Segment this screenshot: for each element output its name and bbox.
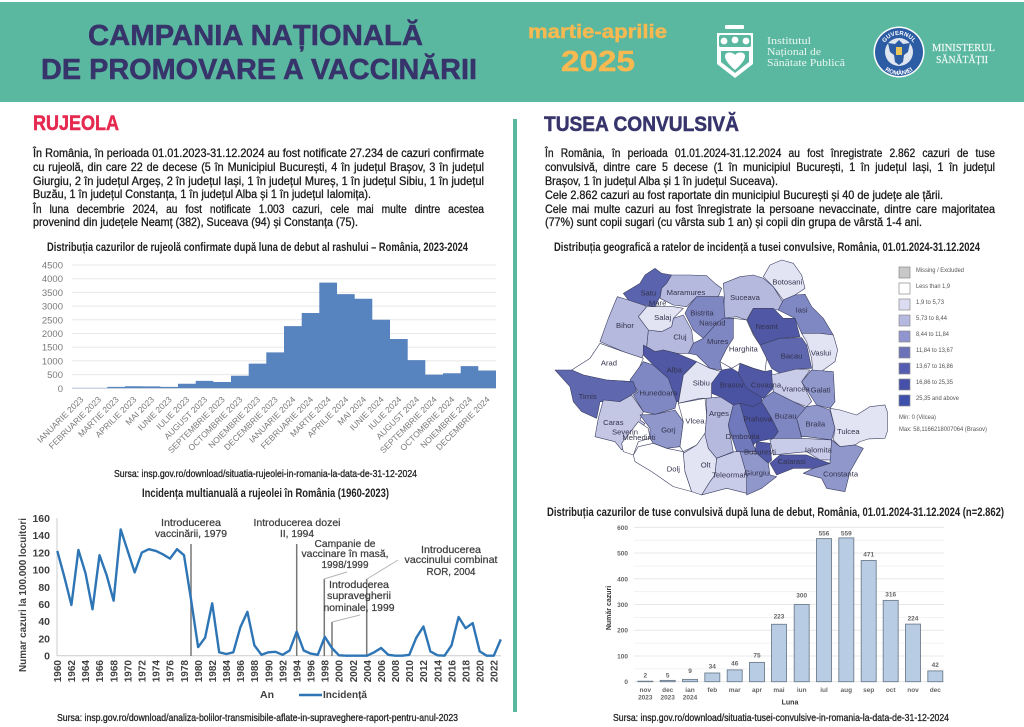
bar chart: measles cases by month: 500: [47, 370, 63, 381]
bar chart: pertussis cases by month: nov: [907, 687, 919, 694]
map: incidence by county: Vlcea: [685, 416, 705, 425]
line chart: multiannual incidence: 60: [38, 599, 50, 611]
bar chart: pertussis cases by month: aug: [841, 687, 852, 694]
bar chart: pertussis cases by month: 223: [774, 614, 785, 621]
header band: [0, 2, 1024, 102]
annotations: supravegherii: [327, 590, 391, 602]
line chart: multiannual incidence: 1982: [208, 660, 219, 682]
title: [41, 19, 477, 86]
map: incidence by county: Hunedoara: [639, 389, 678, 398]
text block: Rujeola summary: [32, 145, 484, 229]
bar chart: measles cases by month: 2000: [42, 329, 63, 340]
text block: Rujeola summary: Giurgiu, 2 în județul Argeș, 2 în județul Iași, 1 în județul Mureș, 1 în județul Sibiu, 1 în județul: [33, 174, 484, 188]
line chart: multiannual incidence: 140: [32, 530, 50, 542]
bar chart: pertussis cases by month: dec: [662, 687, 674, 694]
annotations: ROR, 2004: [426, 566, 476, 578]
bar chart: measles cases by month: IUNIE 2023: [136, 394, 174, 432]
text block: Rujeola summary: cu rujeolă, din care 22 de decese (5 în Municipiul București, 4 în județul Brașov, 3 în județul: [33, 160, 484, 174]
line chart: multiannual incidence: 2020: [476, 660, 486, 682]
bar chart: measles cases by month: MAI 2023: [123, 394, 156, 427]
line chart: multiannual incidence: 1984: [222, 660, 233, 682]
bar chart: measles cases by month: [35, 260, 496, 455]
bar chart: measles cases by month: IANUARIE 2024: [247, 394, 298, 445]
line chart: multiannual incidence: 1990: [264, 660, 275, 682]
annotations: Introducerea dozei: [254, 517, 340, 529]
line chart: multiannual incidence: 2010: [405, 660, 416, 682]
bar chart: pertussis cases by month: 600: [617, 525, 628, 532]
bar chart: pertussis cases by month: apr: [752, 687, 763, 694]
text block: pertussis summary: (77%) sunt copii sugari (cu vârsta sub 1 an) și copii din grupa de vârstă 1-4 ani.: [545, 215, 922, 229]
bar chart: pertussis cases by month: 0: [624, 679, 628, 686]
bar chart: pertussis cases by month: 2023: [638, 694, 653, 702]
line chart: multiannual incidence: 1968: [109, 660, 120, 682]
map legend: 8,44 to 11,84: [916, 332, 950, 338]
line chart: multiannual incidence: 100: [32, 565, 50, 577]
bar chart: pertussis cases by month: 556: [819, 530, 830, 537]
line chart: multiannual incidence: 2006: [377, 660, 388, 682]
map: incidence by county: Giurgiu: [744, 469, 769, 478]
line chart: multiannual incidence: [17, 513, 501, 701]
source: measles multiannual: Sursa: insp.gov.ro/download/analiza-bolilor-transmisibile-aflate-in-supraveghere-raport-pentru-anul-2023: [57, 712, 458, 724]
map: incidence by county: Tulcea: [837, 427, 860, 436]
map: incidence by county: Gorj: [661, 425, 676, 434]
line chart: multiannual incidence: 2004: [363, 660, 374, 682]
bar chart: measles cases by month: 4500: [42, 260, 63, 272]
map: incidence by county: Salaj: [654, 313, 671, 322]
bar chart: pertussis cases by month: 200: [617, 628, 628, 635]
map: incidence by county: Alba: [667, 365, 683, 374]
bar chart: measles cases by month: IULIE 2023: [154, 394, 192, 431]
panel: Tusea convulsiva: [544, 113, 1004, 724]
map: incidence by county: Vaslui: [811, 349, 831, 358]
line chart: multiannual incidence: 1962: [67, 660, 78, 682]
bar chart: pertussis cases by month: 5: [666, 672, 670, 679]
map: incidence by county: Neamt: [755, 322, 779, 331]
line chart: multiannual incidence: 1996: [307, 660, 318, 682]
line chart: multiannual incidence: 2012: [419, 660, 430, 682]
line chart: multiannual incidence: 1966: [95, 660, 106, 682]
map: incidence by county: Severin: [612, 428, 638, 437]
map legend: Missing / Excluded: [916, 268, 964, 274]
annotations: vaccinare în masă,: [302, 548, 388, 560]
panel: Rujeola: [17, 112, 501, 724]
chart title: measles multiannual: Incidența multianuală a rujeolei în România (1960-2023): [142, 488, 389, 500]
campaign date: [528, 22, 667, 78]
bar chart: measles cases by month: APRILIE 2024: [305, 394, 351, 440]
bar chart: pertussis cases by month: 100: [617, 654, 628, 660]
line chart: multiannual incidence: 1960: [53, 660, 64, 682]
text block: Rujeola summary: provenind din județele Neamț (382), Suceava (94) și Constanța (75).: [33, 215, 358, 229]
text block: pertussis summary: [544, 145, 995, 229]
map: incidence by county: Ialomita: [805, 445, 832, 454]
campaign date: 2025: [561, 46, 635, 78]
line chart: multiannual incidence: 1994: [292, 660, 304, 682]
bar chart: pertussis cases by month: 75: [753, 652, 761, 659]
logo: Institutul National de Sanatate Publica: Institutul: [767, 35, 811, 47]
map: incidence by county: Brasov: [720, 380, 744, 389]
map: incidence by county: [555, 260, 887, 495]
map: incidence by county: Nasaud: [699, 319, 726, 328]
line chart: multiannual incidence: 0: [44, 651, 50, 663]
legend: Incidență: [323, 689, 367, 701]
map: incidence by county: Mare: [649, 299, 666, 308]
map: incidence by county: Iasi: [796, 305, 808, 314]
map legend: 16,86 to 25,35: [916, 380, 954, 386]
map: incidence by county: Olt: [701, 460, 711, 469]
line chart: multiannual incidence: 2014: [433, 660, 444, 682]
map: incidence by county: Timis: [579, 392, 597, 401]
map: incidence by county: Galati: [811, 385, 831, 394]
map legend: Max: 58,1166218007064 (Brasov): [899, 427, 987, 433]
map: incidence by county: Botosani: [772, 278, 803, 287]
map: incidence by county: Buzau: [775, 411, 797, 420]
line chart: multiannual incidence: 2008: [391, 660, 402, 682]
bar chart: pertussis cases by month: iun: [797, 687, 807, 694]
bar chart: measles cases by month: MARTIE 2023: [76, 394, 121, 439]
logo: Ministerul Sanatatii: SĂNĂTĂȚII: [936, 54, 988, 66]
chart title: measles monthly: Distribuția cazurilor de rujeolă confirmate după luna de debut al rashului – România, 2023-2024: [47, 242, 468, 254]
line chart: multiannual incidence: 1972: [138, 660, 148, 682]
bar chart: pertussis cases by month: sep: [863, 687, 874, 694]
bar chart: pertussis cases by month: 316: [885, 591, 897, 598]
map: incidence by county: Arges: [709, 409, 729, 418]
bar chart: measles cases by month: 3000: [42, 302, 63, 313]
bar chart: measles cases by month: MAI 2024: [335, 394, 368, 427]
map legend: 1,9 to 5,73: [916, 300, 945, 306]
annotations: Campanie de: [314, 538, 376, 550]
map: incidence by county: Teleorman: [712, 470, 748, 479]
map: incidence by county: Constanta: [823, 469, 859, 478]
line chart: multiannual incidence: 120: [32, 547, 50, 559]
map: incidence by county: Bacau: [781, 351, 803, 360]
map: incidence by county: Bistrita: [690, 309, 714, 318]
bar chart: pertussis cases by month: oct: [886, 687, 896, 694]
line chart: multiannual incidence: 1974: [152, 660, 163, 682]
vaccination milestones: [191, 544, 398, 656]
annotations: Introducerea: [421, 544, 481, 556]
legend: [260, 689, 367, 701]
line chart: multiannual incidence: 2018: [462, 660, 472, 682]
bar chart: measles cases by month: 3500: [42, 288, 63, 299]
map: incidence by county: Vrancea: [782, 384, 810, 393]
bar chart: pertussis cases by month: 2023: [660, 694, 675, 702]
vertical divider: [513, 119, 517, 712]
map: incidence by county: Sibiu: [693, 378, 710, 387]
bar chart: pertussis cases by month: ian: [685, 687, 695, 694]
bar chart: pertussis cases by month: Număr cazuri: [606, 586, 613, 630]
map legend: [899, 267, 987, 433]
bar chart: pertussis cases by month: 300: [617, 602, 628, 609]
bar chart: pertussis cases by month: 2: [643, 672, 647, 679]
line chart: multiannual incidence: 2000: [335, 660, 346, 682]
bar chart: measles cases by month: NOIEMBRIE 2023: [206, 394, 262, 450]
map: incidence by county: Cluj: [673, 333, 687, 342]
map legend: 5,73 to 8,44: [916, 316, 948, 322]
map: incidence by county: Dolj: [667, 465, 680, 474]
logo: Institutul National de Sanatate Publica: Sănătate Publică: [767, 57, 845, 69]
annotations: nominale, 1999: [324, 602, 395, 614]
annotations: Introducerea: [329, 579, 389, 591]
bar chart: pertussis cases by month: 34: [709, 663, 716, 670]
line chart: multiannual incidence: 1998: [321, 660, 332, 682]
bar chart: measles cases by month: OCTOMBRIE 2023: [186, 394, 245, 453]
line chart: multiannual incidence: 40: [38, 616, 50, 628]
bar chart: measles cases by month: FEBRUARIE 2024: [259, 394, 315, 451]
map: incidence by county: Bihor: [616, 321, 634, 330]
line chart: multiannual incidence: 2016: [447, 660, 458, 682]
map legend: 13,67 to 16,86: [916, 364, 954, 370]
bar chart: measles cases by month: 0: [58, 384, 63, 395]
line chart: multiannual incidence: 1964: [81, 660, 92, 682]
map legend: 11,84 to 13,67: [916, 348, 954, 354]
line chart: multiannual incidence: 1976: [166, 660, 177, 682]
line chart: multiannual incidence: 1986: [236, 660, 247, 682]
bar chart: pertussis cases by month: 2024: [683, 694, 698, 702]
annotations: vaccinului combinat: [404, 554, 498, 566]
bar chart: pertussis cases by month: 400: [617, 576, 628, 583]
title: DE PROMOVARE A VACCINĂRII: [41, 53, 477, 86]
map: incidence by county: Mures: [707, 337, 728, 346]
line chart: multiannual incidence: 1980: [194, 660, 205, 682]
line chart: multiannual incidence: 1992: [278, 660, 289, 682]
bar chart: pertussis cases by month: 300: [796, 592, 808, 599]
map: incidence by county: Harghita: [729, 344, 759, 353]
text block: pertussis summary: Cele 2.862 cazuri au fost raportate din municipiul București și 40 de județe ale țării.: [545, 188, 943, 202]
line chart: multiannual incidence: 80: [38, 582, 50, 594]
bar chart: measles cases by month: SEPTEMBRIE 2024: [378, 394, 439, 455]
bar chart: measles cases by month: DECEMBRIE 2024: [434, 394, 492, 452]
bar chart: measles cases by month: AUGUST 2024: [374, 394, 421, 441]
bar chart: measles cases by month: 1500: [42, 343, 63, 354]
map: incidence by county: Bucuresti: [744, 448, 776, 457]
line chart: multiannual incidence: 1970: [123, 660, 134, 682]
title: CAMPANIA NAȚIONALĂ: [88, 19, 423, 52]
map: incidence by county: Calarasi: [778, 457, 806, 466]
annotations: vaccinării, 1979: [155, 528, 227, 540]
bar chart: pertussis cases by month: 471: [863, 552, 875, 559]
line chart: multiannual incidence: 20: [38, 633, 50, 645]
annotations: 1998/1999: [322, 559, 369, 571]
bar chart: measles cases by month: SEPTEMBRIE 2023: [166, 394, 227, 455]
bar chart: pertussis cases by month: 46: [731, 660, 739, 667]
bar chart: pertussis cases by month: nov: [640, 687, 651, 694]
bar chart: pertussis cases by month: Luna: [782, 700, 798, 706]
text block: Rujeola summary: În România, în perioada 01.01.2023-31.12.2024 au fost notificate 27.234 de cazuri confirmate: [32, 145, 484, 160]
bar chart: measles cases by month: DECEMBRIE 2023: [222, 394, 280, 452]
map: incidence by county: Dimbovita: [726, 432, 760, 441]
bar chart: pertussis cases by month: mar: [729, 687, 741, 694]
logo: Ministerul Sanatatii: [874, 26, 995, 78]
bar chart: measles cases by month: APRILIE 2023: [93, 394, 139, 440]
logo: Ministerul Sanatatii: GUVERNUL: [882, 30, 916, 43]
map: incidence by county: Maramures: [667, 288, 706, 297]
line chart: multiannual incidence: Numar cazuri la 100.000 locuitori: [17, 518, 29, 672]
bar chart: measles cases by month: NOIEMBRIE 2024: [418, 394, 474, 450]
bar chart: pertussis cases by month: 559: [841, 530, 852, 537]
bar chart: pertussis cases by month: [606, 525, 944, 706]
bar chart: measles cases by month: OCTOMBRIE 2024: [398, 394, 457, 453]
bar chart: pertussis cases by month: 42: [932, 662, 939, 669]
annotations: II, 1994: [280, 528, 314, 540]
map: incidence by county: Suceava: [730, 293, 761, 302]
line chart: multiannual incidence: 1978: [180, 660, 191, 682]
logo: Institutul National de Sanatate Publica: Național de: [767, 46, 821, 58]
bar chart: measles cases by month: 2500: [42, 315, 63, 326]
heading: Tusea convulsiva: TUSEA CONVULSIVĂ: [544, 113, 739, 136]
bar chart: pertussis cases by month: mai: [773, 687, 785, 694]
bar chart: pertussis cases by month: 9: [688, 668, 692, 675]
line chart: multiannual incidence: 2002: [349, 660, 360, 682]
bar chart: measles cases by month: MARTIE 2024: [288, 394, 333, 439]
map: incidence by county: Caras: [603, 418, 624, 427]
text block: Rujeola summary: În luna decembrie 2024, au fost notificate 1.003 cazuri, cele mai multe dintre acestea: [32, 201, 484, 216]
map: incidence by county: Mehedinti: [622, 433, 656, 442]
bar chart: measles cases by month: IANUARIE 2023: [35, 394, 86, 445]
map legend: Min: 0 (Vilcea): [899, 415, 936, 421]
legend: An: [260, 689, 274, 701]
bar chart: pertussis cases by month: 500: [617, 550, 628, 558]
line chart: multiannual incidence: 1988: [250, 660, 261, 682]
logo: Institutul National de Sanatate Publica: [717, 25, 845, 78]
logo: Ministerul Sanatatii: MINISTERUL: [932, 42, 995, 54]
map legend: Less than 1,9: [916, 284, 951, 290]
bar chart: pertussis cases by month: dec: [930, 687, 941, 694]
bar chart: measles cases by month: 1000: [42, 356, 63, 367]
heading: Rujeola: RUJEOLA: [33, 112, 119, 135]
text block: pertussis summary: Brașov, 1 în județul Alba și 1 în județul Suceava).: [545, 174, 778, 188]
source: pertussis: Sursa: insp.gov.ro/download/situatia-tusei-convulsive-in-romania-la-data-de-31-12-2024: [613, 712, 949, 724]
map: incidence by county: Arad: [601, 359, 617, 368]
campaign date: martie-aprilie: [528, 22, 667, 43]
bar chart: pertussis cases by month: 224: [908, 615, 919, 622]
bar chart: pertussis cases by month: feb: [707, 687, 717, 694]
annotations: [155, 517, 498, 614]
logo: Ministerul Sanatatii: ROMÂNIEI: [885, 67, 913, 76]
bar chart: measles cases by month: FEBRUARIE 2023: [47, 394, 103, 451]
bar chart: measles cases by month: 4000: [42, 274, 63, 285]
text block: Rujeola summary: Buzău, 1 în județul Constanța, 1 în județul Alba și 1 în județul Ialomița).: [33, 187, 371, 201]
annotations: Introducerea: [161, 517, 221, 529]
map: incidence by county: Braila: [806, 420, 826, 429]
line chart: multiannual incidence: 160: [32, 513, 50, 525]
bar chart: measles cases by month: IUNIE 2024: [348, 394, 386, 432]
line chart: multiannual incidence: 2022: [490, 660, 501, 682]
bar chart: pertussis cases by month: iul: [820, 687, 828, 694]
map: incidence by county: Covasna: [751, 380, 782, 389]
map: incidence by county: Satu: [640, 289, 656, 298]
source: measles monthly: Sursa: insp.gov.ro/download/situatia-rujeolei-in-romania-la-data-de-31-12-2024: [114, 468, 417, 480]
bar chart: measles cases by month: IULIE 2024: [366, 394, 404, 431]
bar chart: measles cases by month: AUGUST 2023: [162, 394, 209, 441]
map legend: 25,35 and above: [916, 396, 960, 402]
map: incidence by county: Prahova: [743, 414, 773, 423]
